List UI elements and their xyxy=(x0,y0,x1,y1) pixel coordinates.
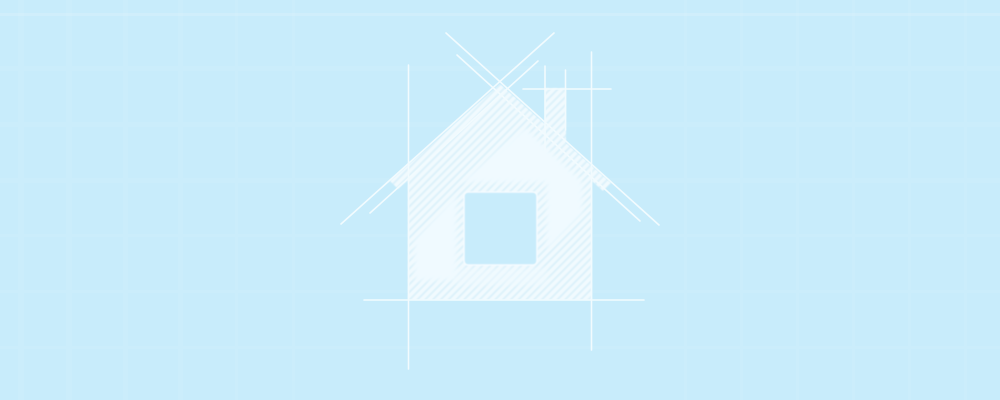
chimney left line xyxy=(544,66,546,150)
top grid line xyxy=(0,13,1000,16)
right wall line xyxy=(590,52,592,350)
floor line xyxy=(364,299,644,301)
roof right outer line xyxy=(446,33,659,225)
roof right inner line xyxy=(457,55,640,221)
chimney top line xyxy=(523,88,611,90)
construction lines xyxy=(341,33,659,369)
solid inner fill above and right of window xyxy=(462,128,582,250)
chimney right line xyxy=(564,70,566,130)
house xyxy=(390,84,611,300)
house body xyxy=(390,84,611,300)
chimney xyxy=(545,88,566,150)
left wall line xyxy=(408,65,410,369)
solid inner fill left of window xyxy=(415,195,456,280)
roof left outer line xyxy=(341,33,554,224)
window xyxy=(464,192,537,265)
light wash below window xyxy=(456,268,547,285)
roof left inner line xyxy=(370,61,538,213)
